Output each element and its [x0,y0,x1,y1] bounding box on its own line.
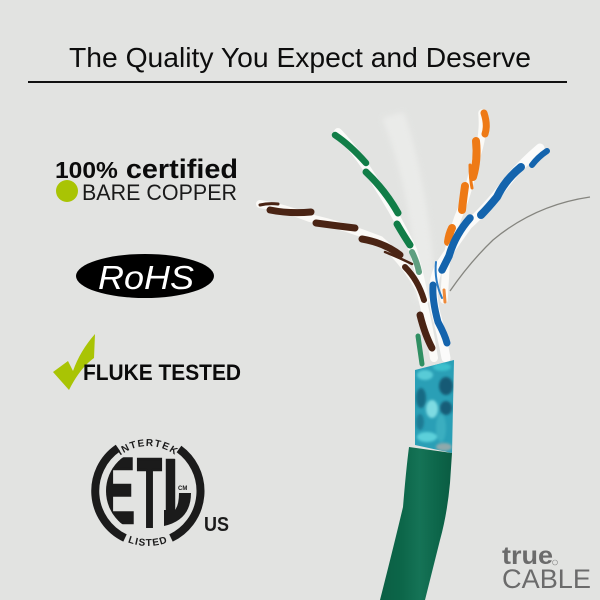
green pair [335,132,425,364]
RoHS text: RoHS [98,259,194,296]
logo registered mark [552,560,558,565]
badge: ETL listed mark [91,439,229,546]
Fluke tested text: FLUKE TESTED [83,360,241,385]
foil shield [415,360,454,453]
RoHS ellipse [76,254,214,298]
blue pair [433,148,547,358]
certified heading: 100% certified [55,154,238,184]
bare copper text: BARE COPPER [82,180,237,205]
title: The Quality You Expect and Deserve [69,42,531,73]
L curve [164,493,191,526]
US text: US [204,514,229,536]
logo word true: true [502,542,553,570]
badge: Fluke tested [53,334,241,390]
badge: RoHS [76,254,214,298]
translucent film [382,112,436,300]
logo: trueCABLE [502,542,591,594]
drain wire [450,197,590,291]
ETL letters [106,457,176,528]
logo word CABLE: CABLE [502,564,591,594]
icon: green dot [56,180,78,202]
outer ring arcs [95,448,201,538]
CM mark: CM [178,486,187,492]
ETL letters: E [102,438,135,543]
badge: 100% certified bare copper [55,154,238,205]
icon: green check mark [53,334,95,390]
orange pair [444,113,486,302]
cable photo illustration [260,112,590,600]
brown pair [260,204,434,358]
green jacket [380,447,452,600]
Listed arc text: LISTED [128,536,166,546]
ETL letters: I [163,443,178,532]
title rule [28,81,567,83]
Intertek arc text: INTERTEK [118,439,178,456]
ETL letters: T [137,438,162,548]
